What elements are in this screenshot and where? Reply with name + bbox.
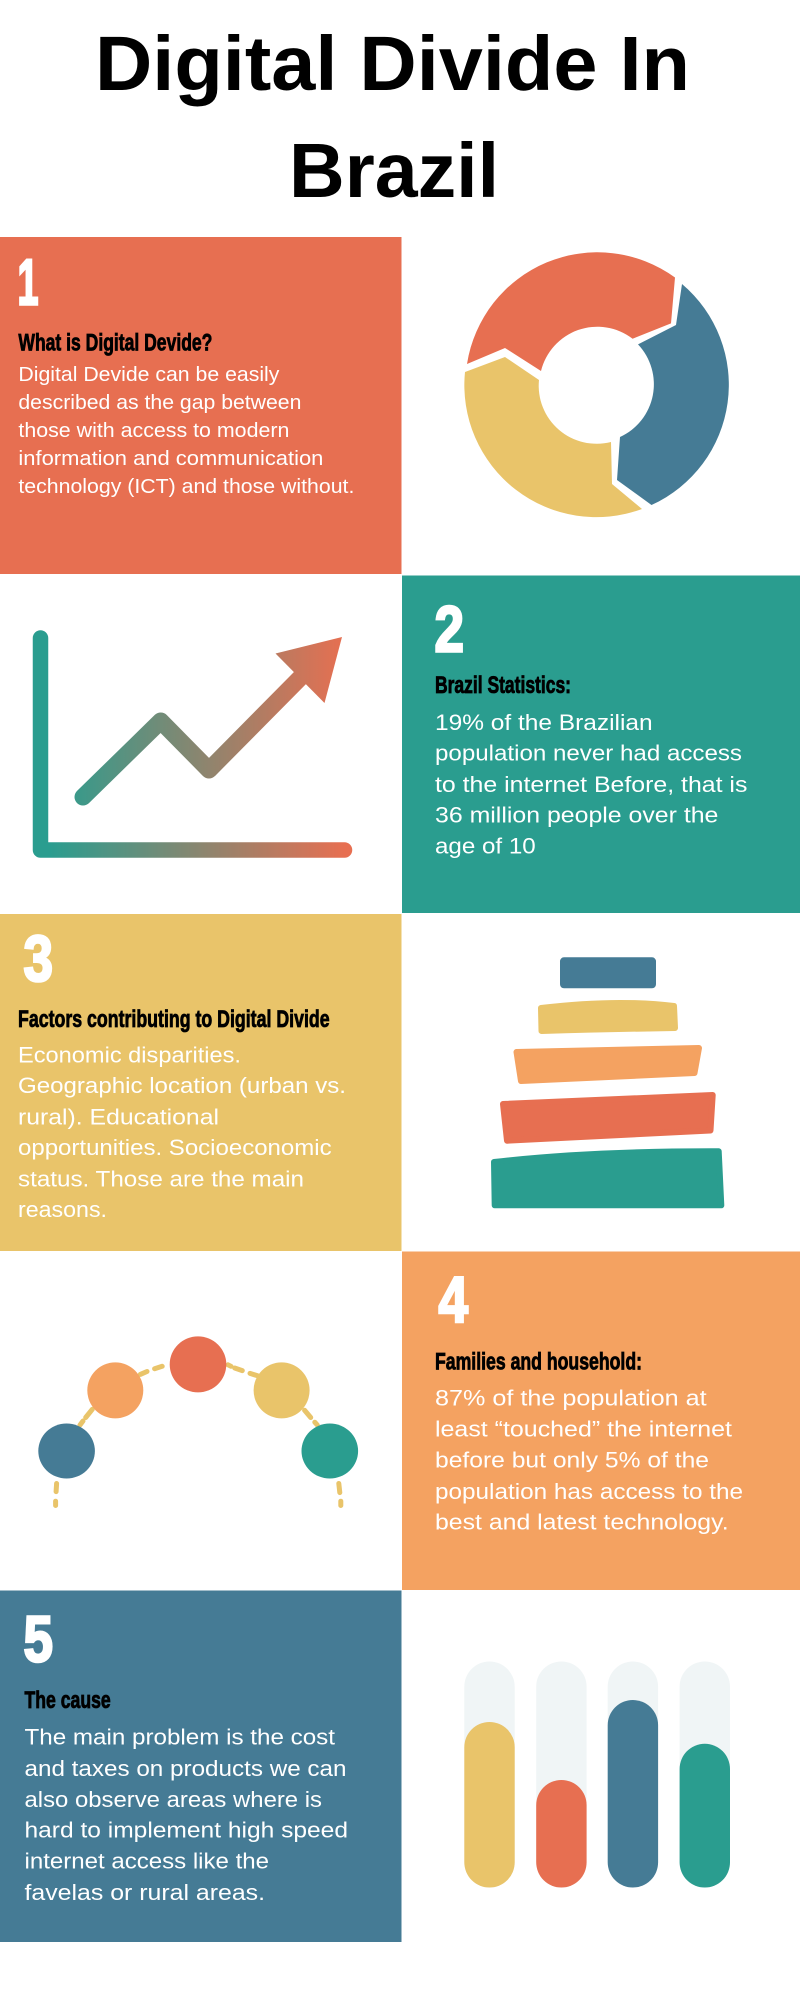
text block: the cause: hard to implement high speed	[24, 1818, 348, 1843]
text block: definition: Digital Devide can be easily	[18, 364, 279, 386]
text block: the cause: The main problem is the cost	[24, 1725, 335, 1750]
text block: statistics	[435, 710, 747, 858]
text block: definition	[18, 364, 354, 498]
text block: statistics: 36 million people over the	[435, 803, 718, 828]
heading: families: Families and household:	[435, 1349, 642, 1376]
panel: families and household	[402, 1252, 800, 1590]
text block: families: 87% of the population at	[435, 1386, 707, 1410]
text block: statistics: to the internet Before, that is	[435, 772, 747, 797]
chart: stacked pyramid	[494, 957, 721, 1205]
text block: factors: status. Those are the main	[18, 1166, 304, 1192]
heading: brazil statistics: Brazil Statistics:	[435, 672, 571, 699]
chart: vertical pill bars	[464, 1662, 730, 1888]
text block: factors: reasons.	[18, 1197, 107, 1222]
text block: families: least “touched” the internet	[435, 1417, 732, 1442]
text block: definition: described as the gap between	[18, 392, 301, 414]
text block: factors	[18, 1042, 346, 1222]
text block: statistics: age of 10	[435, 834, 536, 858]
heading: the cause: The cause	[24, 1687, 111, 1714]
text block: definition: information and communication	[18, 448, 323, 470]
chart: rising line with arrow	[40, 637, 344, 850]
text block: definition: technology (ICT) and those without.	[18, 476, 354, 498]
number 5: 5	[24, 1602, 53, 1676]
text block: the cause: also observe areas where is	[24, 1787, 322, 1812]
panel: brazil statistics	[402, 576, 800, 913]
number 4: 4	[438, 1263, 468, 1336]
text block: factors: Geographic location (urban vs.	[18, 1073, 346, 1098]
text block: statistics: 19% of the Brazilian	[435, 710, 653, 735]
text block: definition: those with access to modern	[18, 420, 289, 442]
text block: families: best and latest technology.	[435, 1509, 729, 1534]
text block: factors: Economic disparities.	[18, 1042, 241, 1067]
text block: the cause: internet access like the	[24, 1849, 269, 1874]
text block: families: before but only 5% of the	[435, 1448, 709, 1473]
number 3: 3	[24, 922, 53, 995]
heading: factors: Factors contributing to Digital Divide	[18, 1006, 330, 1033]
title: Brazil	[289, 128, 499, 214]
text block: factors: opportunities. Socioeconomic	[18, 1135, 332, 1160]
text block: families: population has access to the	[435, 1479, 743, 1504]
text block: statistics: population never had access	[435, 741, 742, 766]
heading: what is digital devide: What is Digital Devide?	[18, 330, 212, 356]
title	[95, 21, 690, 214]
text block: families	[435, 1386, 743, 1534]
text block: factors: rural). Educational	[18, 1104, 219, 1130]
panel: the cause	[0, 1590, 402, 1942]
panel: what is digital divide	[0, 237, 402, 574]
chart: arc of circles	[38, 1336, 358, 1506]
text block: the cause	[24, 1725, 348, 1905]
title: Digital Divide In	[95, 21, 690, 107]
text block: the cause: favelas or rural areas.	[24, 1880, 265, 1905]
number 2: 2	[434, 593, 464, 666]
number 1: 1	[18, 246, 38, 318]
panel: factors contributing	[0, 914, 402, 1251]
text block: the cause: and taxes on products we can	[24, 1756, 346, 1781]
chart: donut cycle	[464, 252, 729, 517]
